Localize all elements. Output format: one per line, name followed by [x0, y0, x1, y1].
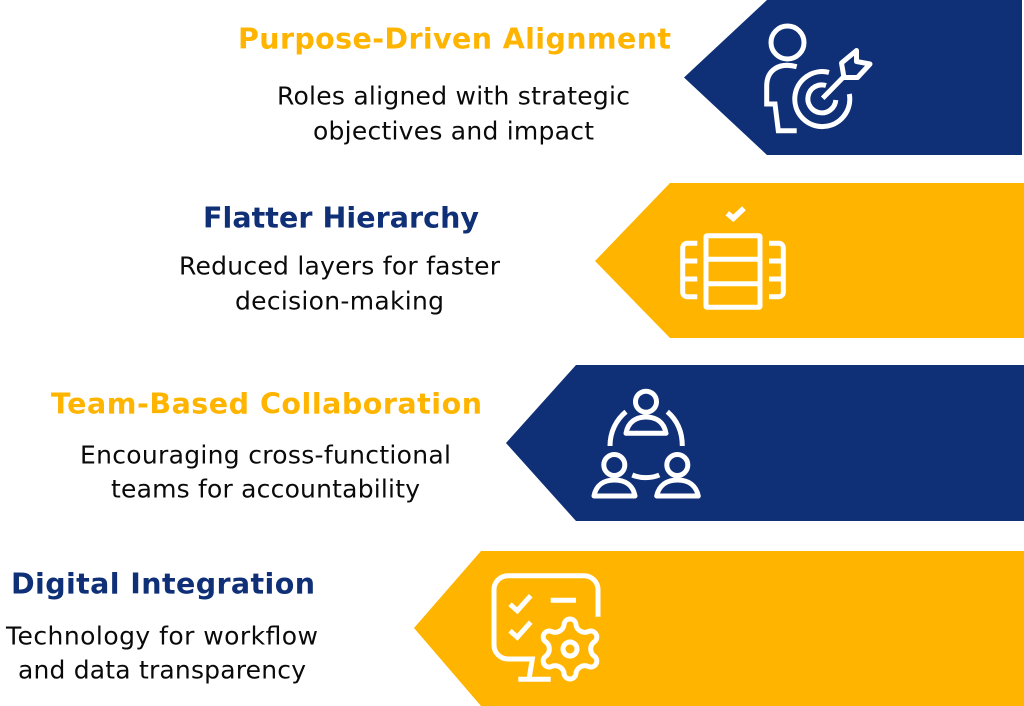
icon: monitor with checklist and gear [494, 576, 598, 679]
panel: Flatter Hierarchy [179, 183, 1024, 338]
arrow banner: amber [414, 551, 1024, 706]
description: decision-making [235, 286, 444, 316]
heading: Flatter Hierarchy [203, 202, 479, 234]
arrow banner: navy [506, 365, 1024, 521]
arrow banner: amber [595, 183, 1024, 338]
panel: Digital Integration [5, 551, 1024, 706]
description: Technology for workflow [5, 622, 318, 650]
panel: Purpose-Driven Alignment [238, 0, 1022, 155]
description [80, 440, 451, 504]
description: and data transparency [18, 656, 306, 684]
icon: person with target and arrow [767, 26, 870, 131]
description: teams for accountability [111, 474, 420, 504]
description: objectives and impact [313, 116, 594, 146]
heading: Purpose-Driven Alignment [238, 22, 671, 56]
arrow banner: navy [684, 0, 1022, 155]
heading: Digital Integration [11, 568, 315, 600]
description [5, 622, 318, 684]
description: Roles aligned with strategic [277, 82, 630, 110]
description [179, 252, 501, 316]
description [277, 82, 630, 146]
heading: Team-Based Collaboration [51, 388, 482, 420]
panel: Team-Based Collaboration [51, 365, 1024, 521]
description: Reduced layers for faster [179, 252, 501, 280]
description: Encouraging cross-functional [80, 440, 451, 470]
icon: stacked table with check mark [683, 208, 783, 307]
icon: three connected people [594, 391, 698, 496]
